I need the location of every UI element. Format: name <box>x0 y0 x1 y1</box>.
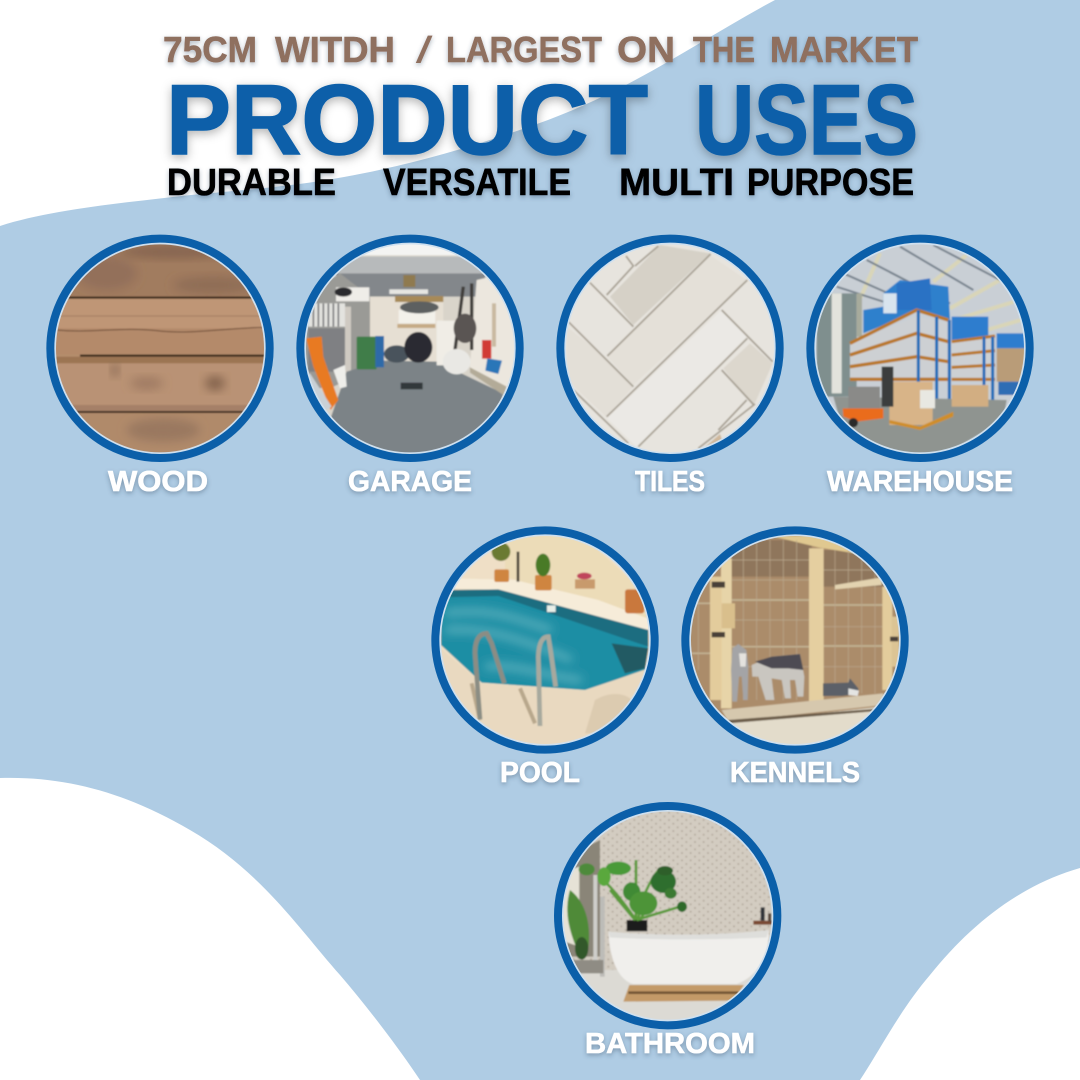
white shape: top left <box>0 0 775 226</box>
panel: tiles <box>550 230 790 498</box>
white shape: bottom right <box>860 868 1080 1080</box>
panel: wood <box>40 230 280 498</box>
label: kennels: KENNELS <box>730 757 860 789</box>
tagline: PURPOSE <box>747 162 914 204</box>
eyebrow heading: MARKET <box>770 29 918 70</box>
panel: garage <box>290 230 530 498</box>
label: pool: POOL <box>500 757 580 789</box>
eyebrow heading: ON <box>617 29 675 70</box>
white shape: bottom left <box>0 778 420 1080</box>
panel: warehouse <box>800 230 1040 498</box>
eyebrow heading: WITDH <box>275 29 395 70</box>
title: PRODUCT <box>166 64 648 175</box>
panel: kennels <box>675 520 915 789</box>
label: tiles: TILES <box>635 466 705 498</box>
tagline: VERSATILE <box>383 162 571 204</box>
eyebrow heading: / <box>414 30 434 70</box>
tagline <box>167 162 914 204</box>
tagline: DURABLE <box>167 162 336 204</box>
label: wood: WOOD <box>108 466 208 498</box>
eyebrow heading: LARGEST <box>446 29 602 70</box>
panel: pool <box>425 520 665 789</box>
title <box>166 64 918 175</box>
label: bathroom: BATHROOM <box>585 1028 755 1060</box>
eyebrow heading: THE <box>693 29 755 70</box>
eyebrow heading <box>163 29 918 70</box>
tagline: MULTI <box>619 162 734 204</box>
eyebrow heading: 75CM <box>163 29 257 70</box>
title: USES <box>695 64 918 175</box>
label: garage: GARAGE <box>348 466 472 498</box>
panel: bathroom <box>550 800 790 1060</box>
label: warehouse: WAREHOUSE <box>827 466 1013 498</box>
